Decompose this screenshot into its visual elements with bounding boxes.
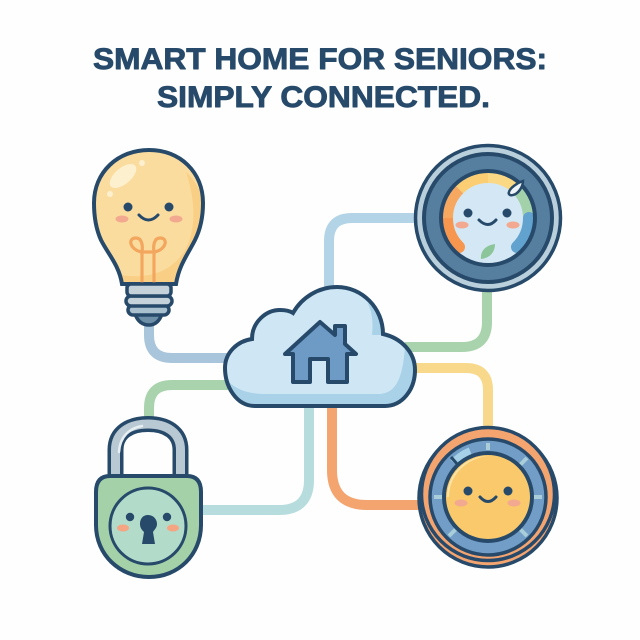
thermostat face [456,208,520,228]
icon: padlock [96,424,201,577]
connector: bulb to cloud [149,320,232,358]
dial face [454,486,520,506]
shackle [116,424,180,476]
house [285,322,356,382]
icon: dial [419,428,557,567]
connector: thermostat to cloud [329,218,416,292]
leaf [481,244,495,259]
title: SMART HOME FOR SENIORS: [93,43,547,76]
bulb screw base [126,284,172,325]
title [93,43,547,114]
icon: cloud with house [225,287,415,406]
bulb face [116,202,182,222]
connector: thermostat to cloud green [405,290,487,347]
icon: light bulb [94,150,203,325]
needle [509,181,523,195]
connector: lock to cloud teal [200,405,309,510]
connector: dial to cloud yellow [410,368,488,430]
title: SIMPLY CONNECTED. [157,81,490,114]
dial ticks [434,443,542,536]
keyhole [140,515,157,544]
lock face [117,513,179,532]
temperature arc [447,177,529,247]
filament [131,238,165,283]
connector: lock to cloud green [149,385,228,420]
lock body [96,476,201,577]
icon: thermostat [416,146,560,290]
connector: dial to cloud orange [332,405,420,505]
